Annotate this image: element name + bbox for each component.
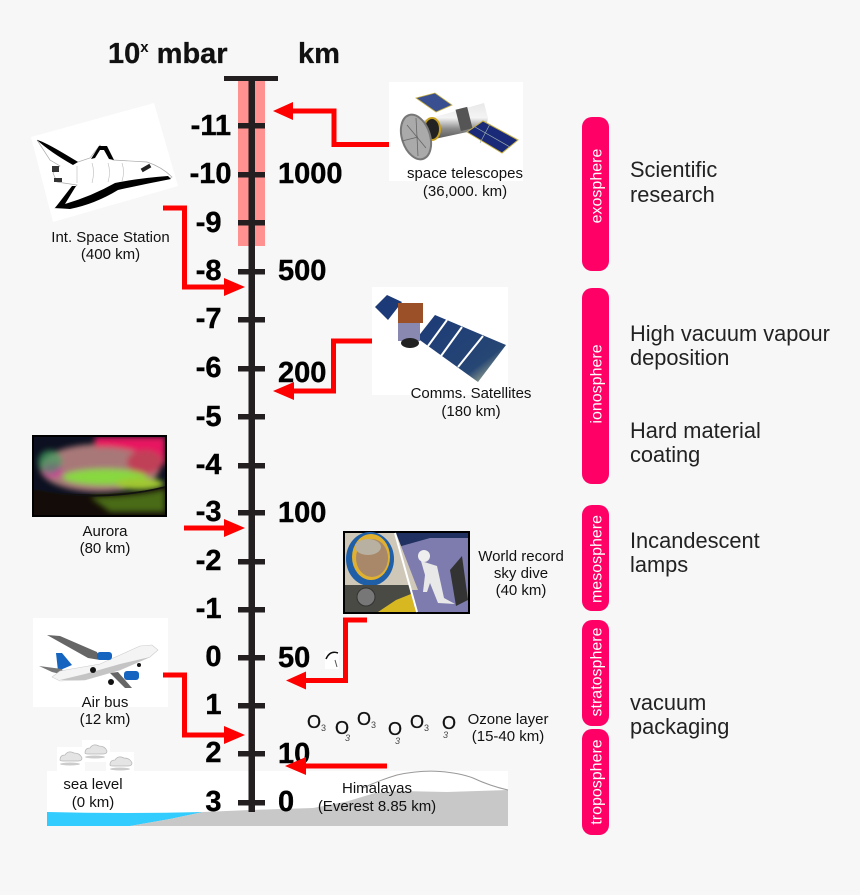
ozone molecules: 3 (443, 730, 448, 740)
ozone molecules: 3 (395, 736, 400, 746)
mbar exponent labels: -5 (196, 401, 222, 433)
label: ozone layer: (15-40 km) (472, 728, 544, 745)
icon: air bus (33, 618, 168, 707)
km labels: 1000 (278, 158, 343, 190)
label: world record sky dive: (40 km) (496, 582, 546, 599)
arrow: satellite to scale (273, 341, 372, 400)
text: vacuum packaging: vacuum (630, 690, 706, 715)
panel: stratosphere (582, 620, 609, 726)
text: incandescent lamps: lamps (630, 552, 688, 577)
ozone molecules: O (335, 718, 349, 738)
label: air bus: (12 km) (80, 711, 130, 728)
km labels: 100 (278, 497, 326, 529)
panel: mesosphere (582, 505, 609, 611)
mbar exponent labels: 2 (205, 737, 222, 769)
ozone molecules: 3 (424, 723, 429, 733)
icon: space telescope (389, 82, 523, 181)
label: world record sky dive: World record (478, 548, 564, 565)
arrow: aurora to scale (184, 519, 245, 537)
mbar exponent labels: -6 (196, 352, 222, 384)
label: world record sky dive: sky dive (494, 565, 548, 582)
ozone molecules: O (357, 709, 371, 729)
panel: troposphere: troposphere (588, 739, 606, 825)
ozone molecules: O (410, 712, 424, 732)
text: scientific research: Scientific (630, 157, 717, 182)
label: International Space Station: (400 km) (81, 246, 140, 263)
label: ozone layer: Ozone layer (468, 711, 548, 728)
heading: km: km (298, 38, 340, 70)
heading: mbar: mbar (149, 38, 228, 70)
ozone molecules: 3 (345, 733, 350, 743)
text: hard material coating: coating (630, 442, 700, 467)
label: Himalayas: Himalayas (342, 780, 412, 797)
mbar exponent labels: 0 (205, 641, 222, 673)
heading: mbar: 10 (108, 38, 140, 70)
panel: ionosphere (582, 288, 609, 484)
mbar exponent labels: -3 (196, 496, 222, 528)
ground scene: sea level and Himalayas (47, 771, 508, 826)
text: hard material coating: Hard material (630, 418, 761, 443)
mbar exponent labels: -10 (190, 158, 232, 190)
panel: troposphere (582, 729, 609, 835)
arrow: Himalayas to scale (285, 757, 387, 775)
km labels: 50 (278, 642, 310, 674)
label: space telescopes: space telescopes (407, 165, 523, 182)
text: incandescent lamps: Incandescent (630, 528, 760, 553)
label: Himalayas: (Everest 8.85 km) (318, 798, 436, 815)
panel: ionosphere: ionosphere (588, 344, 606, 424)
pink vacuum band (238, 78, 265, 246)
scale axis (224, 76, 278, 812)
label: air bus: Air bus (82, 694, 128, 711)
ozone molecules: 3 (321, 723, 326, 733)
km labels: 10 (278, 738, 310, 770)
mbar exponent labels: 1 (205, 689, 222, 721)
mbar exponent labels (190, 110, 232, 818)
ozone molecules: O (442, 713, 456, 733)
mbar exponent labels: -4 (196, 449, 222, 481)
arrow: telescope to scale (273, 102, 389, 144)
ozone molecules: O (307, 712, 321, 732)
arrow: air bus to scale (163, 675, 245, 744)
arrow: ISS to scale (163, 208, 245, 296)
arrow: sky dive to scale (286, 620, 367, 690)
text: high vacuum vapour deposition: High vacuum vapour (630, 321, 830, 346)
label: aurora: (80 km) (80, 540, 130, 557)
mbar exponent labels: -2 (196, 545, 222, 577)
label: communications satellites: (180 km) (441, 403, 501, 420)
mbar exponent labels: -1 (196, 593, 222, 625)
mbar exponent labels: -7 (196, 303, 222, 335)
km labels: 200 (278, 357, 326, 389)
panel: exosphere: exosphere (588, 149, 606, 223)
label: aurora: Aurora (82, 523, 128, 540)
panel: stratosphere: stratosphere (588, 627, 606, 716)
km labels: 500 (278, 255, 326, 287)
photo: world record sky dive (343, 531, 470, 614)
ozone molecules: O (388, 719, 402, 739)
label: sea level: sea level (63, 776, 123, 793)
ozone molecules (307, 709, 456, 746)
icon: communications satellite (372, 287, 508, 395)
label: communications satellites: Comms. Satellites (411, 385, 531, 402)
ozone molecules: 3 (371, 720, 376, 730)
panel: mesosphere: mesosphere (588, 515, 606, 603)
photo: aurora (32, 435, 167, 517)
icon: tiny parachutist (325, 651, 339, 669)
label: International Space Station: Int. Space Station (51, 229, 170, 246)
mbar exponent labels: -8 (196, 255, 222, 287)
text: scientific research: research (630, 182, 715, 207)
text: high vacuum vapour deposition: deposition (630, 345, 729, 370)
icon: space shuttle (31, 103, 178, 222)
km labels (278, 158, 343, 818)
mbar exponent labels: -9 (196, 207, 222, 239)
label: sea level: (0 km) (72, 794, 114, 811)
mbar exponent labels: -11 (191, 110, 231, 142)
clouds (57, 740, 134, 771)
label: space telescopes: (36,000. km) (423, 183, 507, 200)
heading: mbar: x (140, 39, 149, 56)
text: vacuum packaging: packaging (630, 714, 729, 739)
mbar exponent labels: 3 (205, 786, 222, 818)
km labels: 0 (278, 786, 294, 818)
panel: exosphere (582, 117, 609, 271)
